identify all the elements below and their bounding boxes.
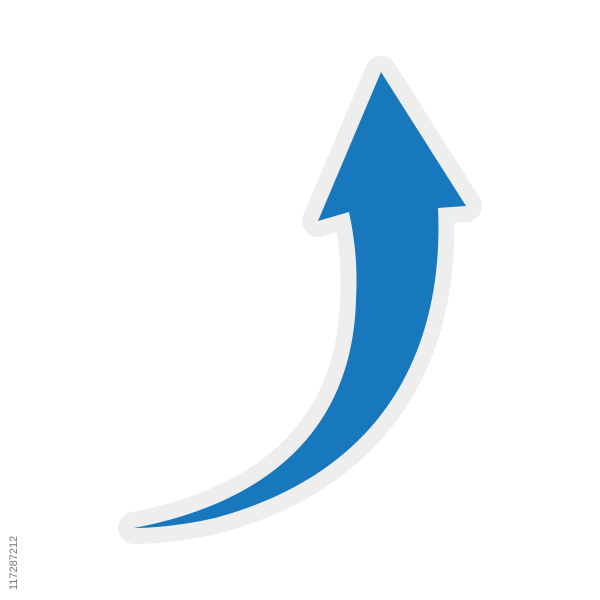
arrow body bbox=[134, 72, 466, 528]
arrow outline sticker bbox=[134, 72, 466, 528]
watermark id text: 117287212 bbox=[8, 536, 20, 590]
